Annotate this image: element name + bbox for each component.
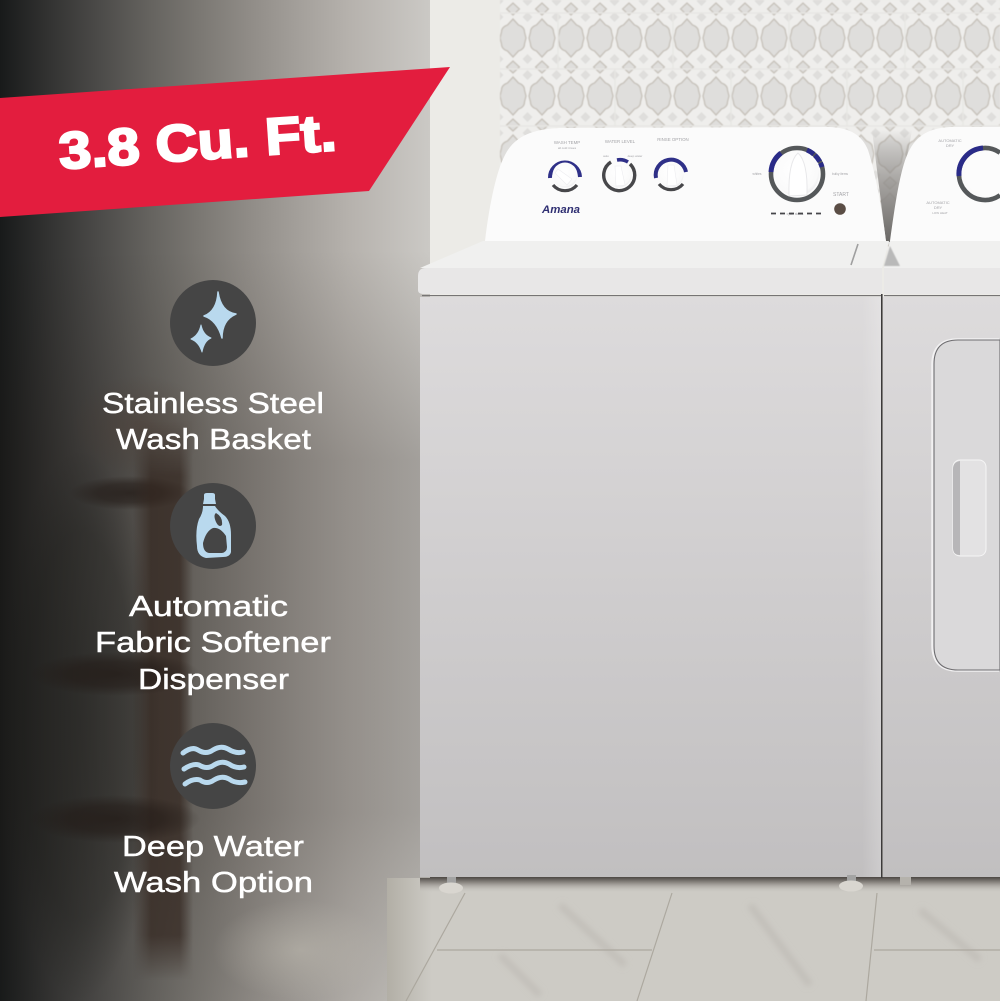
label: deep water wash option: Deep Water [122, 831, 304, 863]
label: stainless steel wash basket: Wash Basket [116, 424, 311, 456]
dryer dial [959, 148, 1000, 200]
washer feet [439, 875, 863, 894]
wash temp knob [550, 162, 580, 191]
icon: sparkles [170, 280, 256, 366]
label: stainless steel wash basket [102, 388, 324, 456]
label: deep water wash option: Wash Option [114, 867, 313, 899]
console labels: deep water [628, 154, 642, 158]
dryer foot [900, 877, 911, 885]
console labels: bulky items [832, 172, 848, 176]
machine gap line [881, 294, 883, 878]
tile backsplash [500, 0, 1000, 250]
dryer labels [926, 138, 962, 215]
console labels: START [833, 192, 849, 198]
dryer body [883, 297, 1000, 877]
cycle dial [771, 148, 823, 200]
console labels: WATER LEVEL [605, 139, 636, 144]
dryer door [932, 340, 1000, 670]
banner title: 3.8 Cu. Ft. [57, 104, 338, 181]
dryer console [890, 127, 1000, 241]
feature: deep water wash option [114, 723, 313, 899]
status lights [771, 212, 821, 214]
dryer [881, 127, 1000, 885]
washer top lip [418, 268, 882, 294]
floor [387, 877, 1000, 1001]
label: automatic fabric softener dispenser: Automatic [129, 591, 288, 623]
console labels: cycle status [787, 212, 804, 216]
icon: water waves [170, 723, 256, 809]
start button [834, 203, 846, 215]
washer body [420, 297, 881, 877]
label: deep water wash option [114, 831, 313, 899]
dryer top lip [884, 268, 1000, 294]
console labels: RINSE OPTION [657, 137, 689, 142]
label: automatic fabric softener dispenser: Fabric Softener [95, 627, 331, 659]
dryer lid [884, 241, 1000, 268]
rinse option knob [656, 160, 686, 190]
console labels: whites [752, 172, 762, 176]
blurred chair silhouette [62, 408, 193, 973]
Amana logo: Amana [541, 204, 580, 216]
left dark gradient panel [0, 0, 430, 1001]
feature: automatic fabric softener dispenser [95, 483, 331, 696]
washer lid [420, 241, 889, 268]
label: automatic fabric softener dispenser [95, 591, 331, 696]
console labels: normal [791, 146, 801, 150]
dryer labels: AUTOMATIC [938, 138, 962, 143]
dryer door handle [953, 460, 986, 556]
washer [418, 127, 889, 894]
label: automatic fabric softener dispenser: Dispenser [138, 664, 289, 696]
console labels: auto [603, 154, 609, 158]
red banner [0, 67, 450, 217]
dryer labels: DRY [934, 205, 943, 210]
lighter floor haze [234, 917, 338, 980]
console labels [554, 137, 849, 216]
water level knob [604, 160, 635, 191]
console labels: WASH TEMP [554, 140, 580, 145]
dryer labels: LOW HEAT [932, 211, 948, 215]
console labels: all cold rinses [558, 146, 577, 150]
shadow between machines [872, 130, 912, 242]
washer console [485, 127, 886, 241]
feature: stainless steel wash basket [102, 280, 324, 456]
blurred dark room area [57, 514, 142, 942]
label: stainless steel wash basket: Stainless Steel [102, 388, 324, 420]
icon: detergent bottle [170, 483, 256, 569]
dryer labels: AUTOMATIC [926, 200, 950, 205]
dryer labels: DRY [946, 143, 955, 148]
